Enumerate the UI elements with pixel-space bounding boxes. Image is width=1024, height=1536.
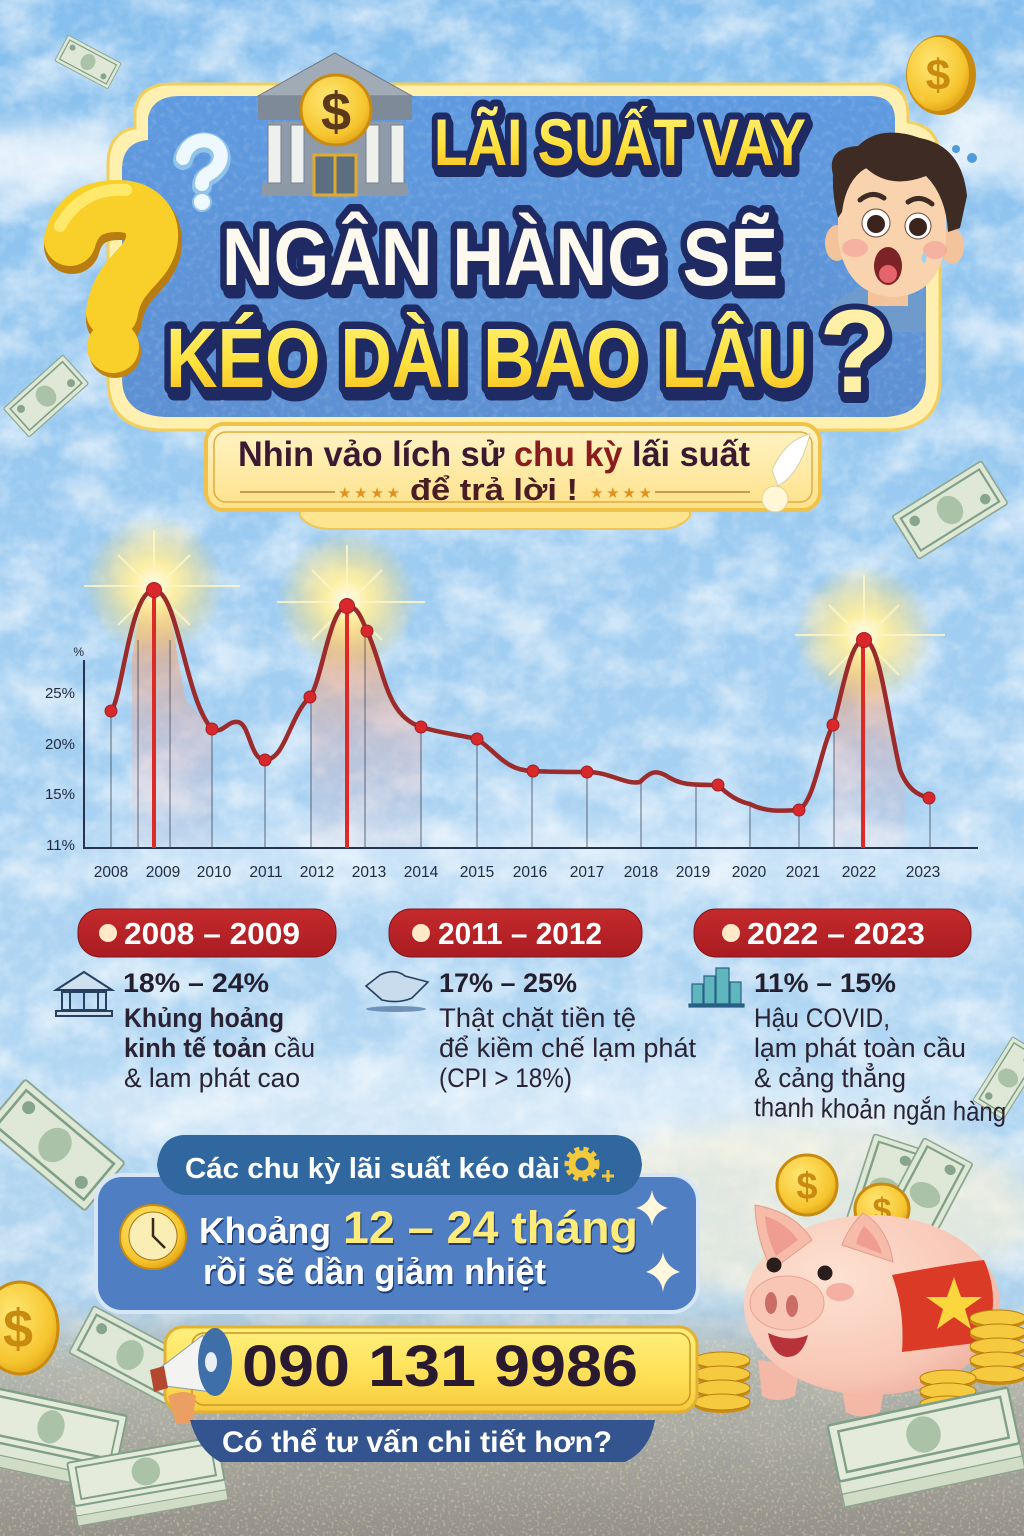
y axis labels: 25%: [45, 685, 75, 702]
cash behind pig: [843, 1134, 973, 1252]
callout header pill: [157, 1135, 642, 1195]
title panel: [108, 84, 940, 430]
pig mouth: [768, 1333, 808, 1357]
x axis labels: 2021: [786, 864, 820, 881]
description: (CPI > 18%): [439, 1063, 572, 1093]
phone number panel: 090 131 9986: [242, 1334, 638, 1399]
peak shaded areas: [132, 590, 905, 848]
x axis labels: 2008: [94, 864, 128, 881]
period pill: [694, 909, 971, 957]
x axis labels: 2012: [300, 864, 334, 881]
x axis labels: 2014: [404, 864, 439, 881]
icon: big gold question mark: [60, 190, 154, 378]
coins above pig: [777, 1155, 909, 1234]
period pill: 2011 – 2012: [438, 916, 602, 951]
subtitle ornaments: [240, 485, 750, 502]
icon: bank building: $: [321, 82, 351, 142]
pig snout: [750, 1276, 824, 1330]
rolled paper corner: [772, 434, 810, 486]
callout panel: cycle duration: 12 – 24 tháng: [343, 1202, 638, 1253]
icon: hand holding: [366, 972, 428, 1012]
description: để kiềm chế lạm phát: [439, 1033, 696, 1063]
x axis labels: 2020: [732, 864, 767, 881]
peak red bars: [154, 592, 863, 848]
axes: [84, 660, 978, 848]
ground with glitter: [0, 1300, 1024, 1536]
phone number panel: [165, 1327, 697, 1412]
period pill: 2022 – 2023: [747, 916, 925, 951]
x axis labels: 2018: [624, 864, 658, 881]
sparkles: [636, 1190, 680, 1292]
bottom question pill: [190, 1420, 655, 1462]
icon: buildings chart: [689, 968, 744, 1007]
rate range: 18% – 24%: [123, 968, 269, 998]
cash stacks on ground: [0, 1386, 1024, 1526]
x axis labels: 2009: [146, 864, 180, 881]
x axis labels: 2016: [513, 864, 547, 881]
callout text line 1: Khoảng: [199, 1210, 331, 1251]
period pill: 2008 – 2009: [124, 916, 300, 951]
x axis labels: 2017: [570, 864, 604, 881]
coin: bottom left: [0, 1282, 58, 1374]
description: Thật chặt tiền tệ: [439, 1003, 636, 1033]
rate curve: [111, 590, 929, 811]
callout panel: cycle duration: [96, 1135, 698, 1312]
icon: clock coin: [120, 1205, 186, 1269]
description: [124, 1003, 315, 1093]
coin: top right: $: [926, 51, 950, 100]
callout header pill: Các chu kỳ lãi suất kéo dài: [185, 1153, 560, 1185]
description: [439, 1003, 696, 1093]
x axis labels: 2013: [352, 864, 386, 881]
y axis labels: [45, 645, 84, 854]
flag on pig: [892, 1260, 993, 1352]
column: 2008-2009: [56, 909, 336, 1093]
icon: small white question mark: [183, 140, 221, 211]
subtitle ornaments: ★★★★: [590, 485, 652, 502]
column: 2011-2012: [366, 909, 696, 1093]
coin: bottom left: $: [3, 1299, 33, 1359]
period pill: [78, 909, 336, 957]
title line 2: NGÂN HÀNG SẼ: [222, 212, 778, 303]
description: Khủng hoảng: [124, 1003, 284, 1033]
value drop lines: [111, 631, 930, 848]
coin stacks: [694, 1310, 1024, 1415]
piggy bank with coins and cash: [694, 1134, 1024, 1416]
subtitle banner: [206, 424, 820, 529]
y axis labels: 11%: [46, 837, 75, 854]
icon: megaphone with hand: [150, 1328, 232, 1424]
description: kinh tế toản cầu: [124, 1033, 315, 1063]
pig legs: [758, 1360, 886, 1416]
pig ears: [755, 1205, 812, 1270]
y axis labels: 20%: [45, 736, 75, 753]
data points: [105, 582, 935, 816]
title line 3: KÉO DÀI BAO LÂU: [166, 311, 808, 405]
x axis labels: 2022: [842, 864, 876, 881]
rate range: 11% – 15%: [754, 968, 896, 998]
y axis labels: %: [73, 645, 84, 659]
column: 2022-2023: [689, 909, 1006, 1127]
x axis labels: 2015: [460, 864, 494, 881]
description: & cảng thẳng: [754, 1061, 906, 1093]
title line 1: LÃI SUẤT VAY: [434, 105, 806, 179]
x axis labels: 2011: [249, 864, 283, 881]
description: [754, 1003, 1006, 1127]
icon: bank with shield: [56, 972, 112, 1016]
callout text line 2: rồi sẽ dần giảm nhiệt: [203, 1251, 546, 1292]
description: lạm phát toàn cầu: [754, 1033, 966, 1063]
x axis labels: 2023: [906, 864, 940, 881]
subtitle ornaments: ★★★★: [338, 485, 400, 502]
coin: top right: [906, 35, 976, 115]
title question mark: ?: [819, 286, 891, 418]
peak glows: [84, 515, 945, 704]
y axis labels: 15%: [45, 786, 75, 803]
coins above pig: $: [873, 1192, 892, 1230]
x axis labels: 2010: [197, 864, 232, 881]
subtitle text line 1: Nhin vảo lích sử chu kỳ lấi suất: [238, 435, 750, 474]
coins above pig: $: [796, 1166, 818, 1208]
x axis labels: 2019: [676, 864, 710, 881]
icon: bank building: [258, 53, 412, 196]
x axis labels: [94, 864, 940, 881]
subtitle text line 2: để trả lời !: [410, 472, 578, 507]
character: worried man: [822, 133, 977, 332]
description: Hậu COVID,: [754, 1003, 890, 1033]
pig body: [744, 1215, 1000, 1395]
line chart: interest rate 2008-2023: [45, 515, 978, 881]
description: & lam phát cao: [124, 1063, 300, 1093]
period pill: [389, 909, 642, 957]
rate range: 17% – 25%: [439, 968, 577, 998]
bottom question pill: Có thể tư vấn chi tiết hơn?: [222, 1426, 612, 1459]
pig eyes: [766, 1258, 782, 1272]
